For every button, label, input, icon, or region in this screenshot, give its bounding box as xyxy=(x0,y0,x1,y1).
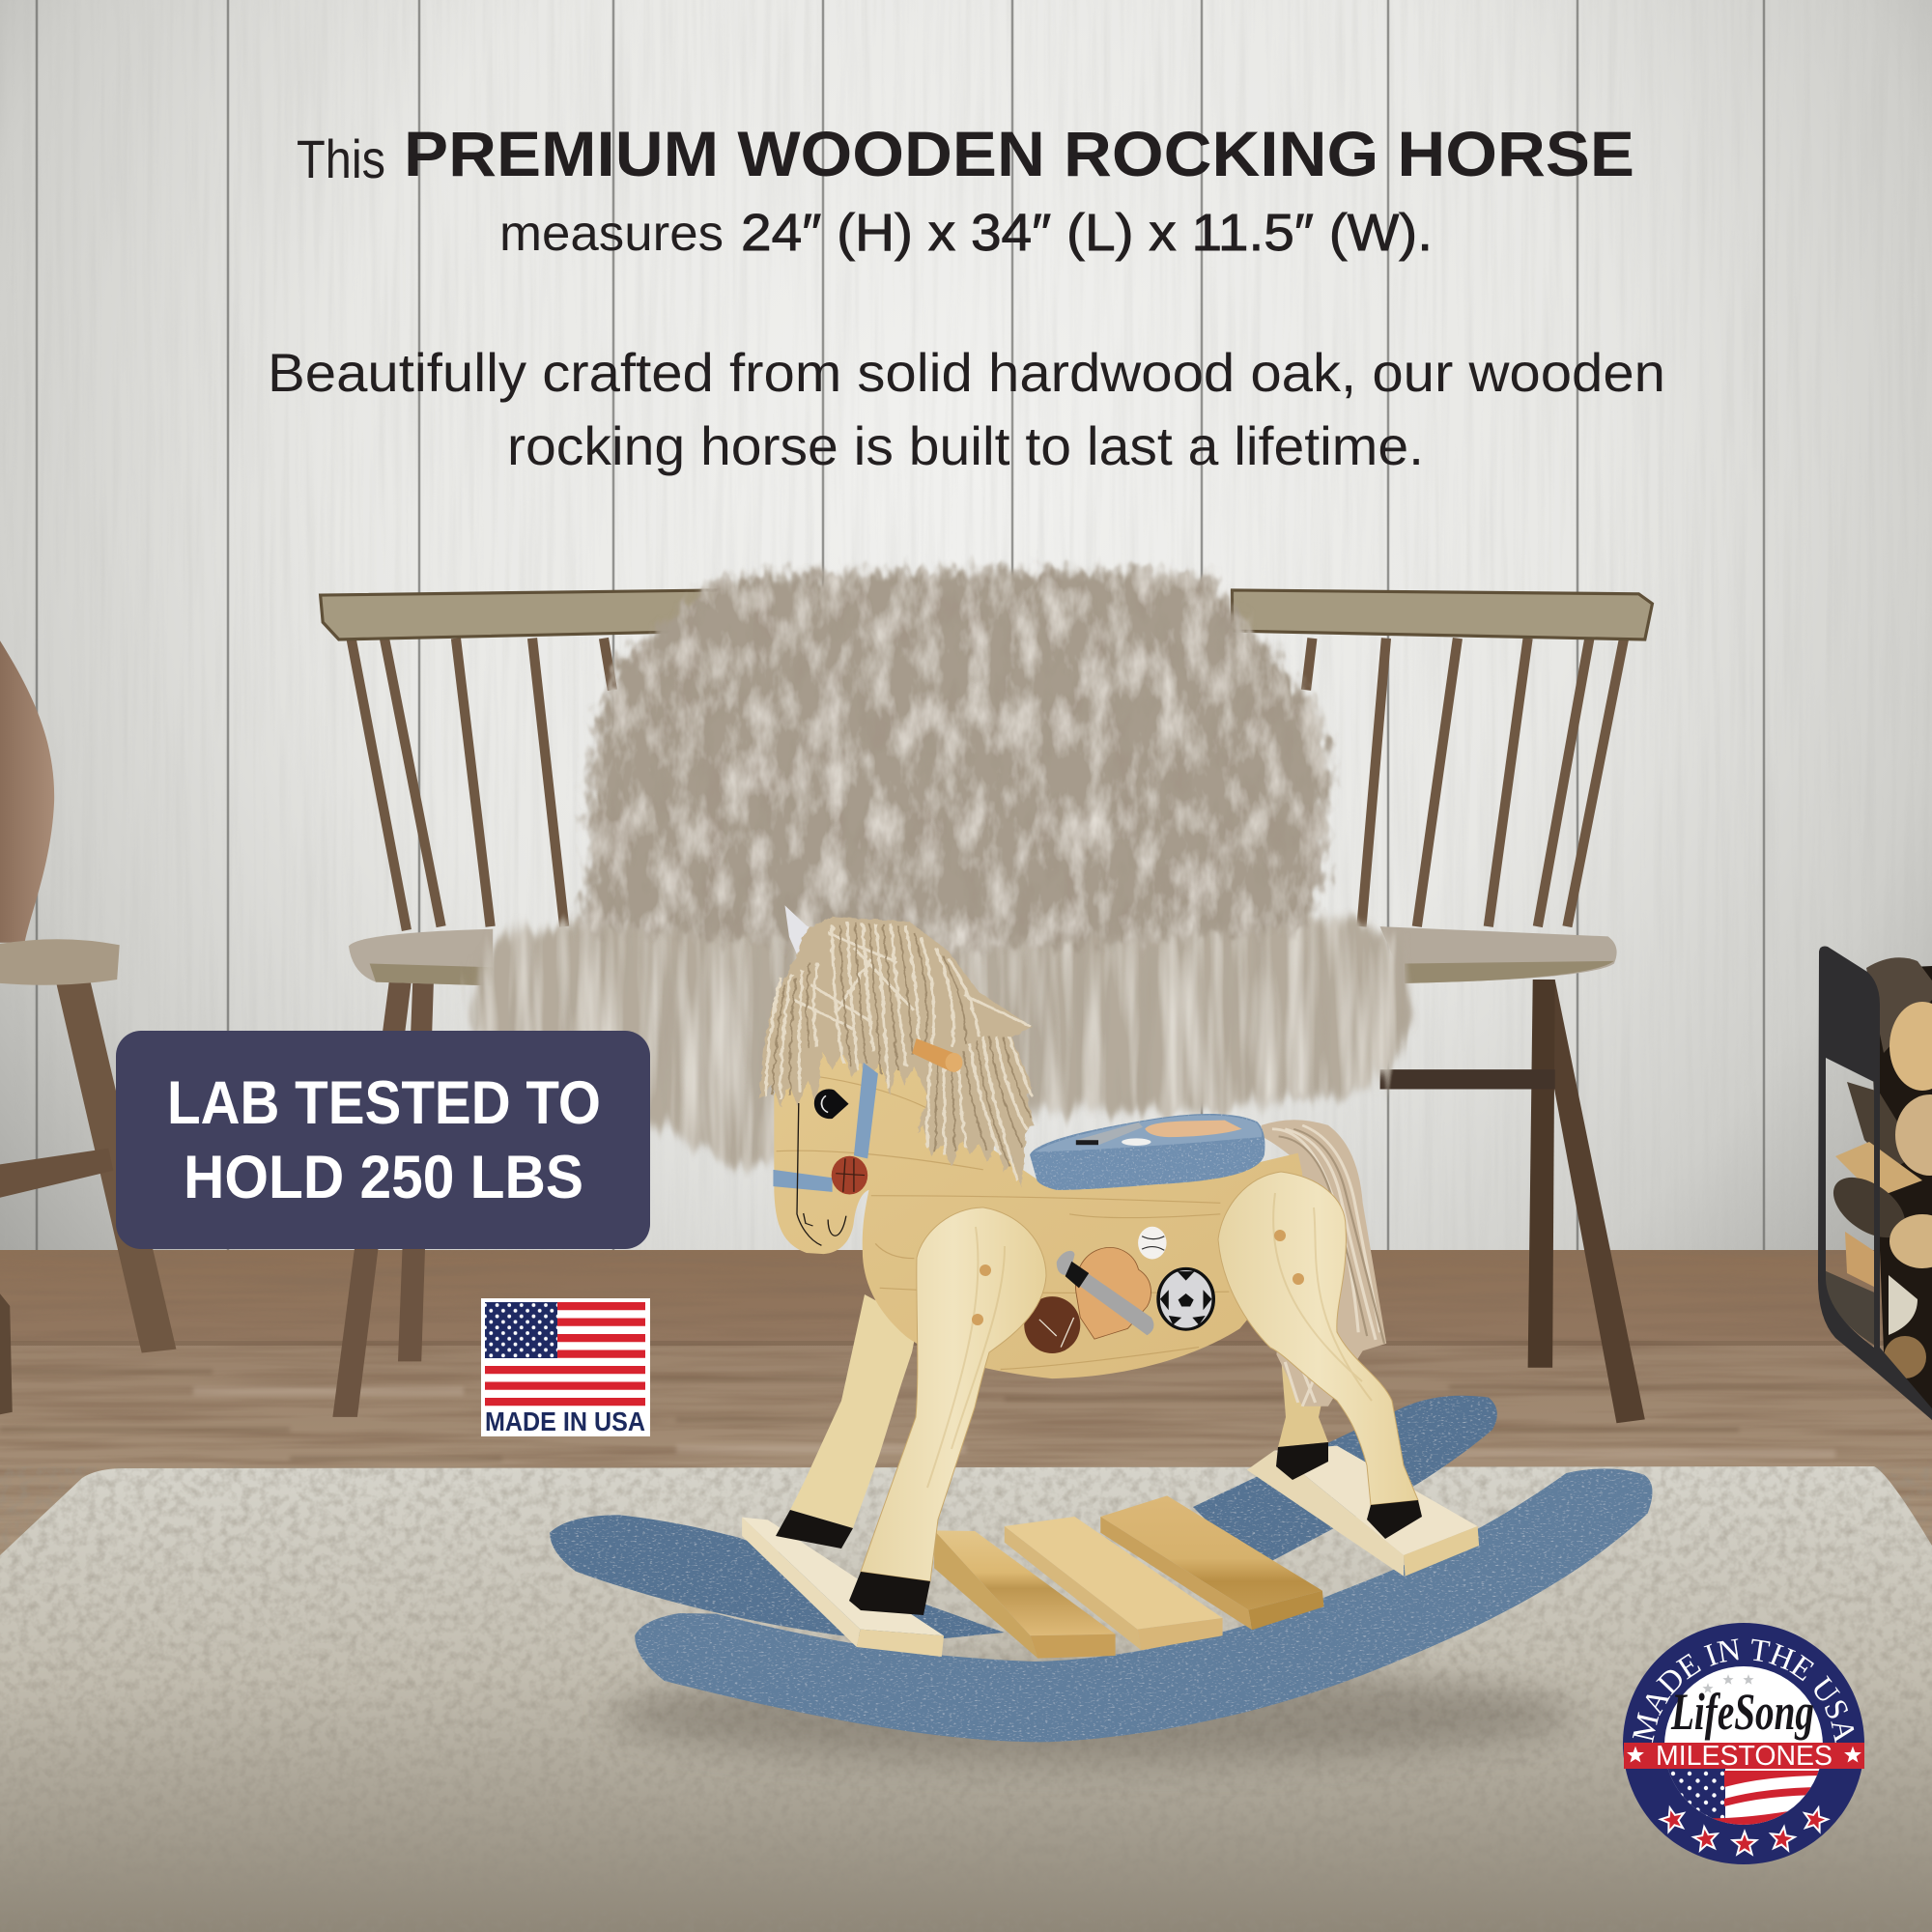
seal script wordmark: LifeSong xyxy=(1670,1683,1814,1741)
background: fur throw xyxy=(473,571,1413,1164)
logo: LifeSong Milestones made in the USA seal xyxy=(1623,1623,1864,1864)
far rocker xyxy=(550,1396,1497,1638)
background: white plank wall xyxy=(0,0,1932,1256)
eye xyxy=(814,1089,849,1119)
dimensions values: 24″ (H) x 34″ (L) x 11.5″ (W). xyxy=(741,204,1433,262)
seal band text: MILESTONES xyxy=(1656,1741,1833,1772)
seal flag xyxy=(1667,1769,1819,1825)
shadow xyxy=(609,1666,1575,1763)
far hooves xyxy=(776,1442,1328,1548)
icon: made in USA flag xyxy=(481,1298,650,1436)
leg dowels xyxy=(972,1230,1304,1325)
rack frame xyxy=(1818,947,1932,1420)
rosette xyxy=(832,1156,867,1194)
seal grey stars xyxy=(1702,1674,1754,1693)
dimensions label: measures xyxy=(499,206,724,262)
body and head xyxy=(774,1051,1302,1378)
description line 1: Beautifully crafted from solid hardwood oak, our wooden xyxy=(268,342,1665,403)
saddle xyxy=(1030,1114,1264,1190)
rocking horse xyxy=(550,905,1653,1763)
background: vase on stool xyxy=(0,640,176,1414)
callout: lab tested badge: LAB TESTED TO xyxy=(167,1069,601,1137)
forelock shadow xyxy=(824,992,849,1024)
sports decals xyxy=(1024,1227,1213,1353)
rear platform xyxy=(1247,1446,1479,1577)
callout: lab tested badge: HOLD 250 LBS xyxy=(184,1144,583,1211)
slat one xyxy=(934,1530,1116,1659)
horse upper body in detail coordinates xyxy=(759,905,1386,1406)
seal star row xyxy=(1659,1804,1830,1855)
leg grain xyxy=(927,1193,1372,1488)
background: woven rug xyxy=(0,1466,1932,1932)
near rocker xyxy=(635,1468,1653,1742)
tail xyxy=(1262,1120,1386,1406)
far front leg xyxy=(790,1294,918,1528)
front platform xyxy=(742,1518,944,1657)
mane xyxy=(759,917,1035,1188)
far rear leg xyxy=(1278,1343,1328,1447)
slat three xyxy=(1100,1495,1323,1630)
seal arc text: MADE IN THE USA xyxy=(1633,1638,1855,1743)
near front leg xyxy=(861,1208,1046,1581)
background: wooden bench xyxy=(321,590,1652,1423)
title text xyxy=(268,118,1665,476)
heading line 1: This xyxy=(297,128,385,189)
ear xyxy=(784,905,828,988)
slat two xyxy=(1005,1517,1223,1650)
near hooves xyxy=(849,1500,1422,1615)
peg xyxy=(912,1038,962,1072)
callout: lab tested badge xyxy=(116,1031,650,1249)
mouth lines xyxy=(797,1103,846,1245)
heading line 1 bold: PREMIUM WOODEN ROCKING HORSE xyxy=(404,118,1634,189)
background: wooden baseboard and floor xyxy=(0,1250,1932,1582)
seal band stars xyxy=(1627,1747,1861,1763)
rockers, slats and platforms xyxy=(550,1396,1653,1742)
bridle xyxy=(773,1063,878,1192)
wood grain xyxy=(777,1073,1229,1370)
description line 2: rocking horse is built to last a lifetime. xyxy=(507,415,1424,476)
seal red band xyxy=(1624,1743,1864,1769)
near rear leg xyxy=(1218,1172,1418,1505)
background: firewood rack xyxy=(1818,947,1932,1420)
icon: made in USA flag: MADE IN USA xyxy=(485,1406,645,1436)
